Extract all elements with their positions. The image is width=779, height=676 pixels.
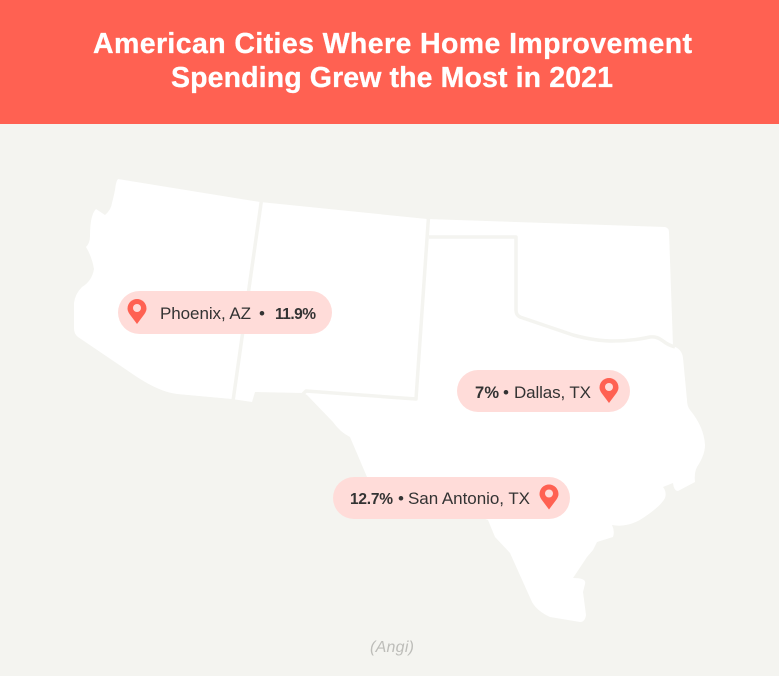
- label: •: [259, 304, 265, 323]
- label: Dallas, TX: [514, 383, 591, 402]
- callout: San Antonio: [333, 477, 570, 519]
- icon: map pin: [128, 299, 146, 324]
- label: •: [503, 383, 509, 402]
- label: •: [398, 489, 404, 508]
- callout: Dallas: [457, 370, 630, 412]
- label: 7%: [475, 384, 499, 402]
- title: Spending Grew the Most in 2021: [171, 62, 613, 94]
- label: 12.7%: [350, 491, 393, 508]
- icon: map pin: [540, 484, 558, 510]
- callout: Phoenix: [118, 291, 332, 334]
- label: Phoenix, AZ: [160, 304, 251, 323]
- title: [93, 28, 692, 94]
- map: Arizona, New Mexico, Oklahoma, Texas: [74, 179, 705, 622]
- title: American Cities Where Home Improvement: [93, 28, 692, 60]
- label: 11.9%: [275, 306, 316, 323]
- icon: map pin: [600, 378, 618, 403]
- header band: [0, 0, 779, 124]
- source: (Angi): [370, 639, 414, 656]
- state borders: [233, 200, 675, 401]
- label: San Antonio, TX: [408, 489, 530, 508]
